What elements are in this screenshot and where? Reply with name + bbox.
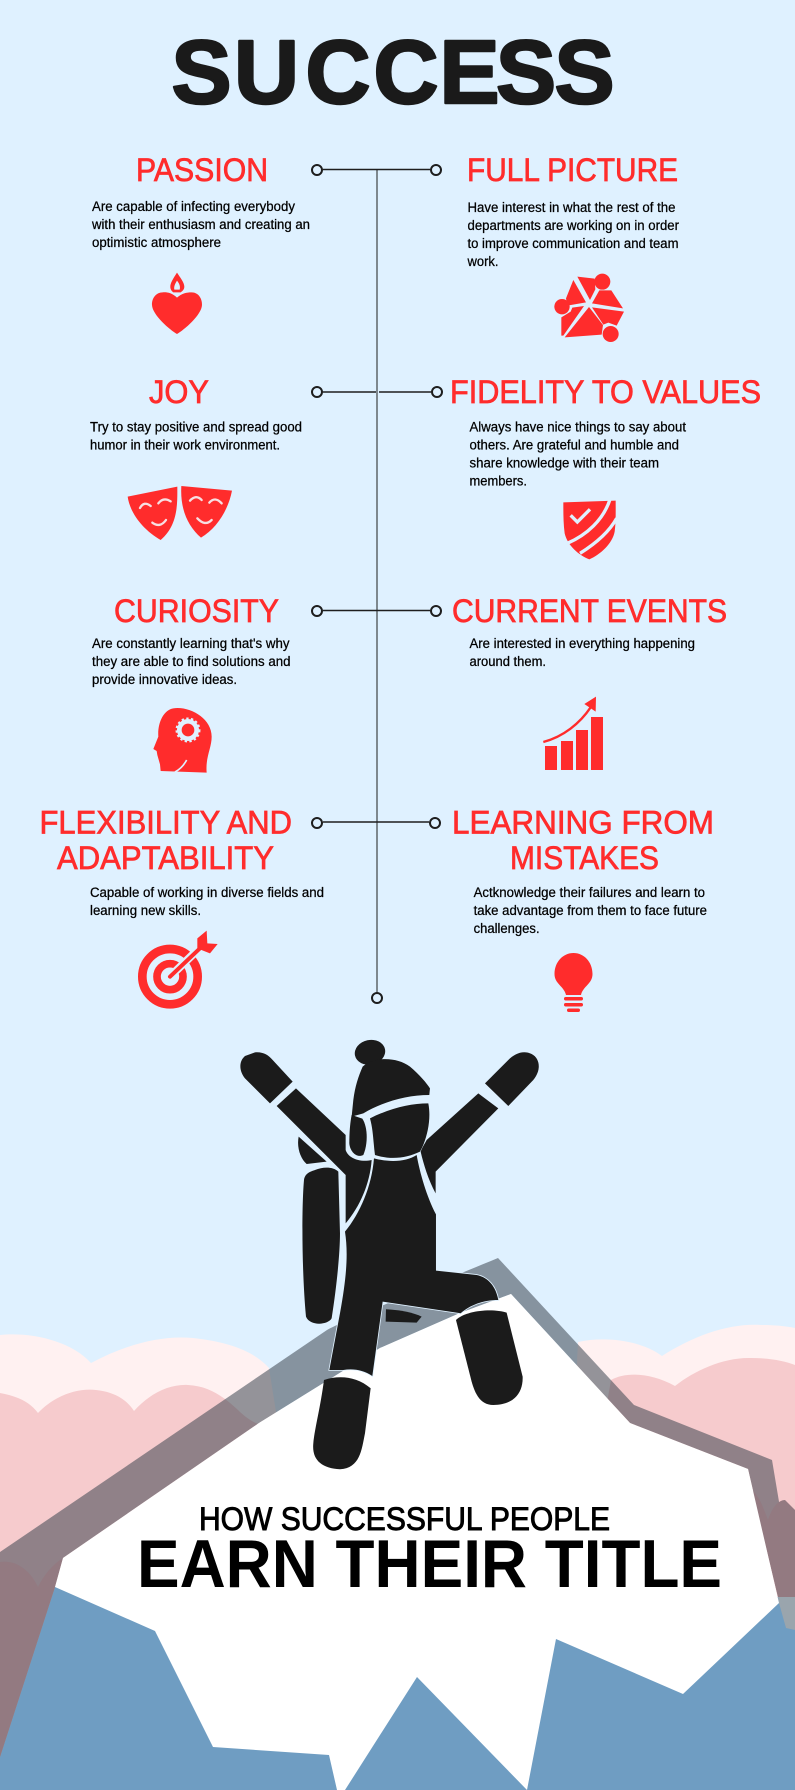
text: flexibility description: learning new skills.	[90, 903, 201, 918]
text: joy description: humor in their work environment.	[90, 438, 280, 452]
icon: flaming heart	[152, 273, 202, 334]
icon: shield with check	[563, 499, 617, 559]
climber figure	[240, 1037, 539, 1469]
panel: passion	[91, 152, 310, 334]
backpack	[298, 1137, 340, 1324]
white snow peak	[55, 1294, 779, 1790]
icon: head with gear	[153, 708, 212, 773]
text: passion description: Are capable of infecting everybody	[92, 199, 295, 214]
torso and upper legs	[329, 1155, 498, 1376]
icon: theatre masks	[128, 486, 232, 540]
text: passion description: with their enthusiasm and creating an	[91, 217, 310, 232]
text: curiosity description: provide innovative ideas.	[92, 672, 237, 687]
text: joy description	[90, 420, 302, 452]
text: full picture description: work.	[467, 254, 498, 269]
heading: full picture: FULL PICTURE	[467, 152, 678, 188]
text: learning description	[474, 885, 707, 936]
panel: curiosity	[92, 593, 290, 773]
left glove	[240, 1052, 293, 1103]
pink clouds	[0, 1358, 795, 1760]
grey mountain ridge	[0, 1258, 795, 1757]
lower left leg	[313, 1377, 371, 1469]
mountain scene	[0, 1258, 795, 1790]
text: full picture description: Have interest in what the rest of the	[468, 200, 676, 215]
blue foothills	[0, 1587, 795, 1790]
heading: flexibility and adaptability: FLEXIBILITY AND	[40, 804, 292, 840]
text: fidelity description: share knowledge with their team	[470, 456, 659, 470]
heading: flexibility and adaptability: ADAPTABILITY	[57, 840, 274, 876]
text: passion description: optimistic atmosphere	[92, 235, 221, 250]
text: passion description	[91, 199, 310, 250]
panel: joy	[90, 374, 302, 540]
text: curiosity description: Are constantly learning that's why	[92, 636, 290, 651]
heading: flexibility and adaptability	[40, 804, 292, 876]
heading: fidelity to values: FIDELITY TO VALUES	[450, 374, 761, 410]
icon: rising bar chart	[543, 697, 603, 770]
heading: learning from mistakes: LEARNING FROM	[452, 804, 714, 840]
text: current events description: Are interested in everything happening	[470, 636, 695, 651]
text: fidelity description: Always have nice things to say about	[470, 420, 686, 434]
headline: earn their title: EARN THEIR TITLE	[137, 1526, 722, 1602]
text: fidelity description: others. Are grateful and humble and	[470, 438, 679, 452]
panel: learning from mistakes	[452, 804, 714, 1012]
dark shadowed rock right	[752, 1490, 795, 1597]
head	[370, 1103, 429, 1158]
heading: current events: CURRENT EVENTS	[452, 593, 727, 629]
right glove	[485, 1052, 539, 1106]
text: learning description: take advantage from them to face future	[474, 903, 707, 918]
ear flap	[349, 1115, 367, 1156]
icon: target with arrow	[142, 931, 218, 1004]
text: joy description: Try to stay positive and spread good	[90, 420, 302, 434]
timeline connector	[312, 165, 442, 1003]
text: full picture description: departments are working on in order	[468, 218, 679, 233]
icon: network pieces	[554, 274, 624, 342]
panel: flexibility and adaptability	[40, 804, 324, 1004]
panel: full picture	[467, 152, 679, 342]
panel: fidelity to values	[450, 374, 761, 559]
text: fidelity description: members.	[470, 474, 527, 488]
between-legs detail	[386, 1309, 422, 1323]
subtitle: how successful people: HOW SUCCESSFUL PEOPLE	[199, 1501, 610, 1537]
heading: learning from mistakes	[452, 804, 714, 876]
panel: current events	[452, 593, 727, 770]
text: learning description: challenges.	[474, 921, 540, 936]
heading: learning from mistakes: MISTAKES	[510, 840, 659, 876]
text: learning description: Actknowledge their failures and learn to	[474, 885, 705, 900]
text: curiosity description: they are able to find solutions and	[92, 654, 290, 669]
right arm	[421, 1093, 498, 1193]
text: full picture description	[467, 200, 679, 269]
light clouds	[0, 1325, 795, 1500]
hat	[352, 1037, 430, 1117]
lower right leg	[456, 1310, 523, 1405]
pale ridge foot	[778, 1597, 795, 1630]
icon: light bulb	[554, 953, 592, 1012]
left arm	[277, 1088, 372, 1223]
text: flexibility description: Capable of working in diverse fields and	[90, 885, 324, 900]
title: SUCCESS: SUCCESS	[172, 23, 615, 123]
text: flexibility description	[90, 885, 324, 918]
text: current events description	[470, 636, 695, 669]
heading: passion: PASSION	[136, 152, 268, 188]
text: fidelity description	[470, 420, 686, 488]
text: current events description: around them.	[470, 654, 546, 669]
text: full picture description: to improve communication and team	[468, 236, 678, 251]
dark shadowed rock left	[0, 1558, 63, 1757]
heading: curiosity: CURIOSITY	[114, 593, 279, 629]
heading: joy: JOY	[149, 374, 209, 410]
text: curiosity description	[92, 636, 290, 687]
